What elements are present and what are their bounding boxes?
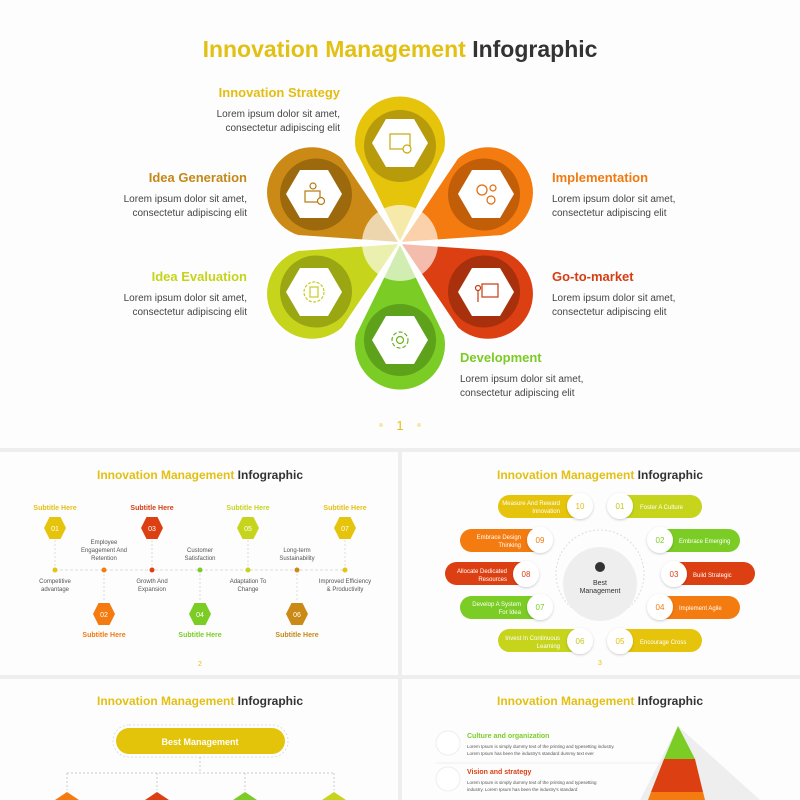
panel: main slide: [0, 0, 800, 448]
step 06: Long-term: [283, 548, 311, 554]
step 07: [319, 505, 371, 593]
hexagon: development: [372, 316, 428, 364]
text: development: [460, 350, 583, 399]
step 02: Employee: [91, 540, 118, 546]
step 05: 05: [244, 526, 252, 533]
petal: development: [354, 243, 446, 391]
panel: timeline: 2: [198, 661, 202, 668]
pill 08: 08: [522, 570, 531, 579]
item: culture: [436, 731, 614, 756]
step 01: Competitive: [39, 579, 71, 585]
step 04: Subtitle Here: [178, 632, 222, 639]
text: development: Lorem ipsum dolor sit amet,: [460, 374, 583, 385]
pill 06: Invest In Continuous: [505, 636, 560, 642]
step 02: [81, 540, 127, 639]
text: idea generation: consectetur adipiscing elit: [132, 208, 247, 219]
pill 05: 05: [616, 637, 625, 646]
item: vision: [436, 767, 597, 792]
pill 07: For Idea: [499, 610, 522, 616]
text: idea generation: Lorem ipsum dolor sit amet,: [124, 194, 247, 205]
step 01: 01: [51, 526, 59, 533]
pill 02: 02: [656, 536, 665, 545]
best management pill: Best Management: [161, 737, 239, 747]
text: idea evaluation: [124, 269, 247, 318]
panel: best management wheel: [402, 452, 800, 675]
step 03: Expansion: [138, 587, 166, 593]
pill 02: [647, 527, 740, 553]
pill 01: 01: [616, 502, 625, 511]
pill 06: 06: [576, 637, 585, 646]
pill 10: 10: [576, 502, 585, 511]
pill 08: [445, 561, 539, 587]
pill 05: Encourage Cross: [640, 640, 686, 646]
step 07: 07: [341, 526, 349, 533]
step 05: Adaptation To: [230, 579, 267, 585]
hexagon: strategy: [372, 119, 428, 167]
page number 1: [379, 418, 421, 433]
step 01: [33, 505, 77, 593]
pill 06: Learning: [537, 644, 560, 650]
pill 09: [460, 527, 553, 553]
item: vision: Vision and strategy: [467, 769, 532, 776]
text: implementation: [552, 170, 675, 219]
pill 08: Resources: [478, 577, 507, 583]
petal: implementation: [377, 129, 551, 283]
pyramid: [640, 726, 760, 800]
panel: pyramid: [402, 679, 800, 800]
step 02: Subtitle Here: [82, 632, 126, 639]
step 07: & Productivity: [327, 587, 363, 593]
text: implementation: consectetur adipiscing elit: [552, 208, 667, 219]
pill 03: 03: [670, 570, 679, 579]
pill 09: Thinking: [498, 543, 521, 549]
step 02: Engagement And: [81, 548, 127, 554]
step 04: Satisfaction: [184, 556, 216, 562]
center circle: Management: [580, 588, 620, 595]
step 05: Subtitle Here: [226, 505, 270, 512]
item: culture: Lorem Ipsum has been the industry's standard dummy text ever: [467, 751, 594, 756]
pill 07: 07: [536, 603, 545, 612]
step 04: 04: [196, 612, 204, 619]
page number 1: 1: [396, 418, 404, 433]
text: go-to-market: consectetur adipiscing elit: [552, 307, 667, 318]
pill 06: [498, 628, 593, 654]
step 06: Sustainability: [279, 556, 315, 562]
petal: go-to-market: [377, 203, 551, 357]
step 04: [178, 548, 222, 639]
pill 04: Implement Agile: [679, 606, 722, 612]
title: Innovation Management Infographic: [203, 36, 598, 62]
step 05: Change: [237, 587, 259, 593]
text: idea evaluation: consectetur adipiscing elit: [132, 307, 247, 318]
pill 03: [661, 561, 755, 587]
text: innovation strategy: consectetur adipiscing elit: [225, 123, 340, 134]
step 03: Growth And: [136, 579, 168, 585]
text: innovation strategy: Lorem ipsum dolor sit amet,: [217, 109, 340, 120]
step 01: Subtitle Here: [33, 505, 77, 512]
item: culture: Culture and organization: [467, 733, 549, 740]
hexagon: evaluation: [286, 268, 342, 316]
best management pill: [113, 725, 288, 757]
panel: best management wheel: 3: [598, 660, 602, 667]
center disc: [362, 205, 438, 281]
text: idea generation: Idea Generation: [149, 170, 247, 185]
step 01: advantage: [41, 587, 70, 593]
pill 02: Embrace Emerging: [679, 539, 730, 545]
pill 10: Innovation: [532, 509, 560, 515]
step 03: 03: [148, 526, 156, 533]
branch shapes: [55, 792, 346, 800]
text: implementation: Lorem ipsum dolor sit amet,: [552, 194, 675, 205]
hexagon: implementation: [458, 170, 514, 218]
text: idea generation: [124, 170, 247, 219]
step 02: 02: [100, 612, 108, 619]
pill 07: [460, 594, 553, 620]
pill 10: [498, 493, 593, 519]
pill 10: Measure And Reward: [502, 501, 560, 507]
step 06: 06: [293, 612, 301, 619]
item: vision: Lorem Ipsum is simply dummy text of the printing and typesetting: [467, 780, 597, 785]
step 06: Subtitle Here: [275, 632, 319, 639]
hexagon: generation: [286, 170, 342, 218]
petal: idea evaluation: [249, 203, 423, 357]
text: development: consectetur adipiscing elit: [460, 388, 575, 399]
step 05: [226, 505, 270, 593]
panel: hierarchy: [0, 679, 398, 800]
step 03: Subtitle Here: [130, 505, 174, 512]
petal: innovation strategy: [354, 95, 446, 243]
panel: pyramid: Innovation Management Infographic: [497, 694, 703, 708]
pill 03: Build Strategic: [693, 573, 732, 579]
item: culture: Lorem Ipsum is simply dummy text of the printing and typesetting industry.: [467, 744, 614, 749]
panel: hierarchy: Innovation Management Infographic: [97, 694, 303, 708]
petal: idea generation: [249, 129, 423, 283]
step 07: Subtitle Here: [323, 505, 367, 512]
center circle: [563, 547, 637, 621]
pill 04: [647, 594, 740, 620]
step 03: [130, 505, 174, 593]
text: go-to-market: [552, 269, 675, 318]
text: development: Development: [460, 350, 542, 365]
step 06: [275, 548, 319, 639]
pill 09: Embrace Design: [477, 535, 521, 541]
step 04: Customer: [187, 548, 213, 554]
pill 04: 04: [656, 603, 665, 612]
pill 01: Foster A Culture: [640, 505, 684, 511]
panel: timeline: [0, 452, 398, 675]
pill 01: [607, 493, 702, 519]
item: vision: industry. Lorem Ipsum has been the industry's standard: [467, 787, 578, 792]
text: innovation strategy: [217, 85, 341, 134]
pill 05: [607, 628, 702, 654]
pill 09: 09: [536, 536, 545, 545]
flower diagram: [249, 95, 551, 391]
text: go-to-market: Go-to-market: [552, 269, 634, 284]
step 02: Retention: [91, 556, 117, 562]
pill 07: Develop A System: [472, 602, 521, 608]
pill 08: Allocate Dedicated: [457, 569, 507, 575]
text: idea evaluation: Idea Evaluation: [152, 269, 247, 284]
panel: best management wheel: Innovation Management Infographic: [497, 468, 703, 482]
panel: timeline: Innovation Management Infographic: [97, 468, 303, 482]
hexagon: go-to-market: [458, 268, 514, 316]
step 07: Improved Efficiency: [319, 579, 371, 585]
text: innovation strategy: Innovation Strategy: [219, 85, 341, 100]
text: go-to-market: Lorem ipsum dolor sit amet,: [552, 293, 675, 304]
center circle: Best: [593, 580, 607, 587]
text: implementation: Implementation: [552, 170, 648, 185]
text: idea evaluation: Lorem ipsum dolor sit amet,: [124, 293, 247, 304]
